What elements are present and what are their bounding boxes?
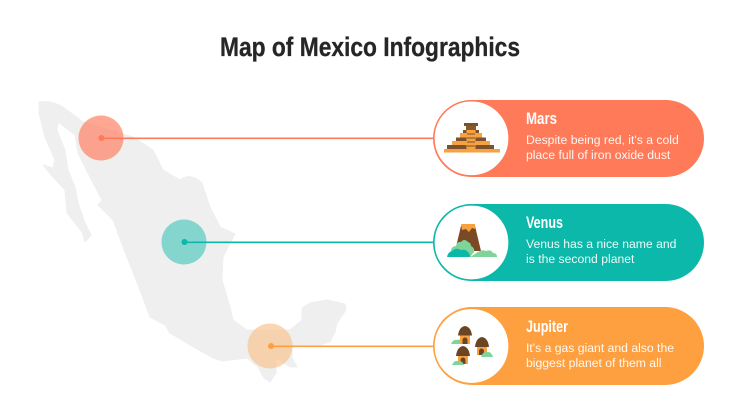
panel: Venus	[433, 204, 704, 281]
icon: huts	[451, 326, 493, 365]
marker: Jupiter location	[248, 324, 434, 368]
marker: Venus location	[162, 220, 434, 264]
panel: Jupiter	[433, 307, 704, 385]
panel: Mars	[433, 100, 704, 177]
heading: Jupiter: Jupiter	[526, 317, 568, 336]
description: Venus: Venus has a nice name and	[526, 237, 676, 251]
icon: pyramid	[444, 123, 500, 152]
description: Jupiter: biggest planet of them all	[526, 356, 662, 370]
map of Mexico	[39, 102, 346, 382]
description: Jupiter: It's a gas giant and also the	[526, 341, 674, 355]
marker: Mars location	[78, 116, 434, 160]
heading: Venus: Venus	[526, 213, 563, 232]
description: Mars: place full of iron oxide dust	[526, 148, 671, 162]
heading: Mars: Mars	[526, 109, 557, 128]
description: Venus: is the second planet	[526, 252, 635, 266]
description: Mars: Despite being red, it's a cold	[526, 133, 679, 147]
title: Map of Mexico Infographics	[220, 32, 520, 62]
icon: volcano	[447, 224, 497, 257]
